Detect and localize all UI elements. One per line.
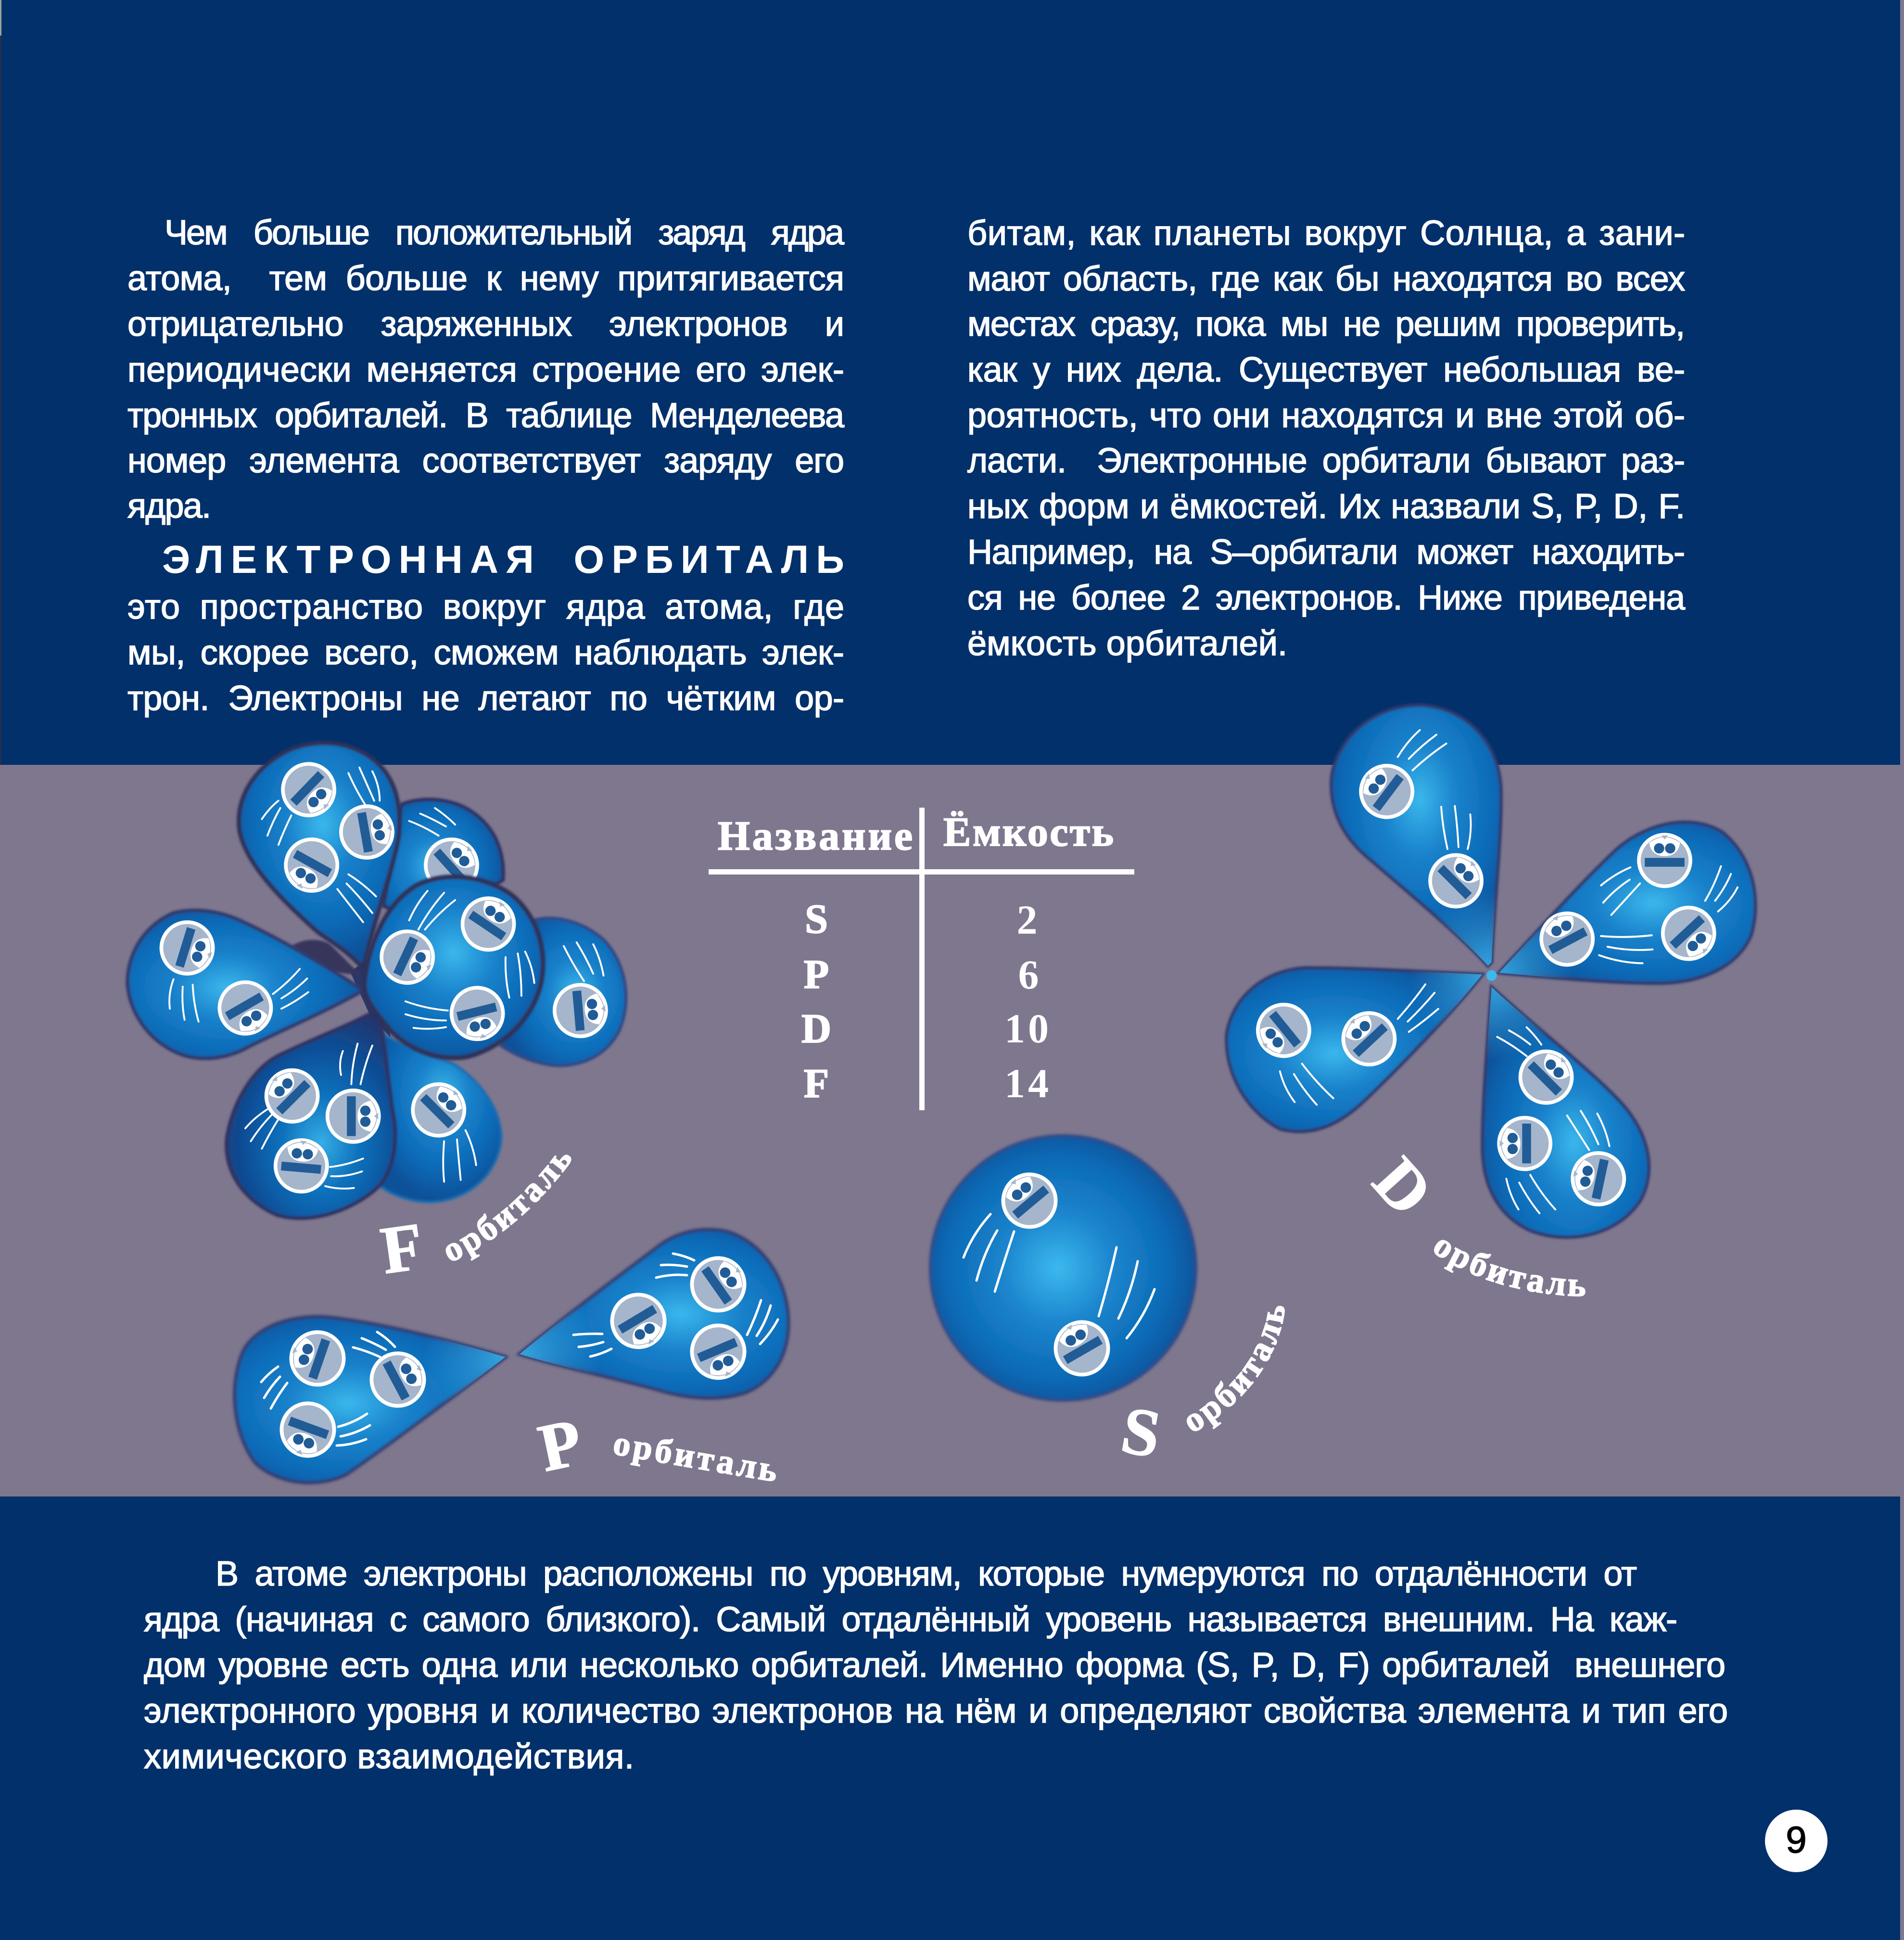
table: orbital capacity: 14 [1004, 1060, 1052, 1106]
left column text: тронных орбиталей. В таблице Менделеева [127, 396, 845, 435]
right column text: ных форм и ёмкостей. Их назвали S, P, D, F. [967, 487, 1685, 526]
table: orbital capacity: F [804, 1060, 829, 1106]
table: orbital capacity: D [801, 1005, 831, 1052]
right column text: ся не более 2 электронов. Ниже приведена [967, 579, 1686, 617]
bottom text block: В атоме электроны расположены по уровням, которые нумеруются по отдалённости от [216, 1555, 1637, 1593]
F orbital label [377, 1154, 571, 1288]
right column text: роятность, что они находятся и вне этой об- [967, 396, 1685, 435]
D orbital [1227, 705, 1755, 1237]
P orbital label: P [533, 1405, 588, 1486]
left column text: трон. Электроны не летают по чётким ор- [127, 679, 844, 718]
right column text: как у них дела. Существует небольшая ве- [967, 351, 1685, 389]
right column text: ёмкость орбиталей. [967, 624, 1287, 663]
right column text: Например, на S–орбитали может находить- [967, 533, 1685, 571]
page number [1765, 1810, 1828, 1872]
bottom text block [144, 1555, 1728, 1776]
table: orbital capacity: Ёмкость [943, 809, 1114, 855]
bottom text block: дом уровне есть одна или несколько орбиталей. Именно форма (S, P, D, F) орбиталей внешнего [144, 1646, 1726, 1685]
table: orbital capacity: S [805, 896, 828, 942]
S orbital label: S [1116, 1392, 1166, 1472]
bottom text block: химического взаимодействия. [144, 1737, 634, 1776]
bottom text block: электронного уровня и количество электронов на нём и определяют свойства элемента и тип его [144, 1692, 1728, 1730]
left column text: отрицательно заряженных электронов и [127, 305, 844, 343]
left column text: номер элемента соответствует заряду его [127, 442, 844, 480]
table: orbital capacity: 2 [1017, 897, 1037, 943]
F orbital label: орбиталь [445, 1154, 571, 1261]
heading: electron orbital: ЭЛЕКТРОННАЯ ОРБИТАЛЬ [162, 538, 844, 582]
grey band behind the orbitals [0, 765, 1904, 1496]
P orbital label [533, 1405, 776, 1486]
P orbital label: орбиталь [614, 1438, 776, 1482]
left column text: ядра. [127, 487, 211, 525]
table: orbital capacity: Название [718, 812, 913, 859]
S orbital label [1116, 1301, 1293, 1472]
S orbital [930, 1136, 1196, 1400]
left column text [127, 214, 845, 718]
right column text: местах сразу, пока мы не решим проверить, [967, 305, 1685, 343]
S orbital label: орбиталь [1186, 1306, 1285, 1432]
F orbital [127, 743, 626, 1218]
table: orbital capacity: 10 [1004, 1005, 1052, 1052]
right column text [967, 214, 1686, 663]
left column text: атома, тем больше к нему притягивается [127, 259, 844, 298]
table: orbital capacity: P [804, 951, 829, 997]
D orbital label: D [1359, 1143, 1447, 1230]
right column text: ласти. Электронные орбитали бывают раз- [967, 442, 1685, 480]
right column text: мают область, где как бы находятся во всех [967, 260, 1685, 298]
left column text: мы, скорее всего, сможем наблюдать элек- [127, 634, 844, 672]
D orbital label: орбиталь [1434, 1240, 1586, 1297]
left column text: это пространство вокруг ядра атома, где [127, 588, 844, 626]
page number: 9 [1786, 1818, 1807, 1861]
right column text: битам, как планеты вокруг Солнца, а зани- [967, 214, 1685, 253]
bottom text block: ядра (начиная с самого близкого). Самый отдалённый уровень называется внешним. На каж- [144, 1600, 1677, 1639]
left column text: Чем больше положительный заряд ядра [165, 214, 845, 252]
F orbital label: F [377, 1209, 428, 1288]
table: orbital capacity [709, 808, 1134, 1110]
left column text: периодически меняется строение его элек- [127, 351, 844, 389]
D orbital label [1359, 1143, 1586, 1297]
P orbital [235, 1230, 788, 1483]
table: orbital capacity: 6 [1018, 951, 1039, 998]
